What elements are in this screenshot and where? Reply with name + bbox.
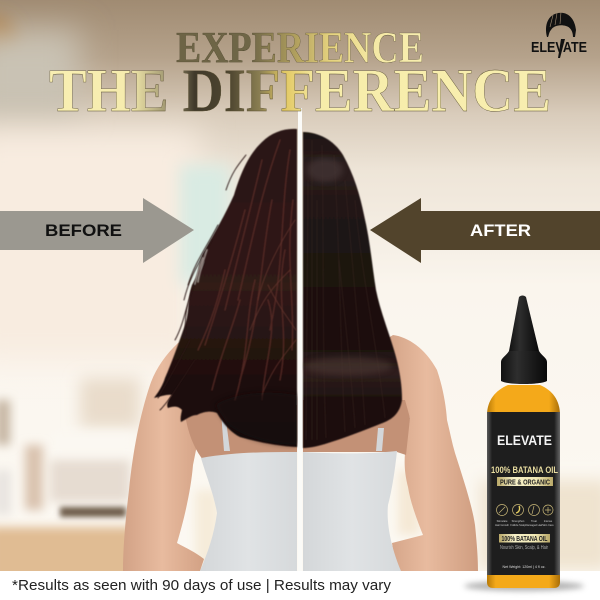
benefit captions: Stimulate — [497, 519, 508, 523]
straight strand highlights — [306, 140, 385, 440]
hair shine band — [304, 357, 392, 375]
arrow: after — [370, 198, 600, 263]
benefit captions: Damaged Hair — [526, 523, 542, 527]
right strap — [376, 428, 384, 451]
bottle body — [487, 385, 560, 588]
cap — [501, 351, 547, 384]
nozzle — [509, 296, 539, 351]
benefit captions: Skin Care — [542, 523, 554, 527]
black label — [487, 412, 560, 575]
product bottle — [464, 296, 584, 591]
right back skin — [303, 400, 410, 455]
right tank top — [303, 451, 401, 571]
centre divider line — [298, 108, 302, 571]
benefit captions: Intense — [544, 519, 553, 523]
left tank top — [200, 452, 297, 571]
title line 2: THE DIFFERENCE — [49, 58, 551, 125]
flyaway and highlight strands — [158, 140, 296, 410]
before photo: woman's back with frizzy hair — [123, 129, 297, 571]
title — [49, 23, 551, 125]
nourish line: Nourish Skin, Scalp, & Hair — [500, 545, 548, 551]
frizzy hair mass — [154, 129, 297, 447]
logo wordmark: ELEVATE — [531, 39, 587, 56]
brand logo — [531, 12, 587, 58]
benefit captions: Hair Growth — [495, 523, 509, 527]
benefit captions: Strengthen — [512, 519, 525, 523]
title line 1: EXPERIENCE — [176, 23, 424, 72]
right arm and shoulder — [385, 335, 478, 571]
logo tick — [558, 39, 565, 58]
arrow: before — [0, 198, 194, 263]
benefit captions: Treat — [531, 519, 537, 523]
before label: BEFORE — [45, 221, 122, 240]
benefit captions — [495, 519, 554, 527]
disclaimer footnote: *Results as seen with 90 days of use | Results may vary — [12, 577, 391, 594]
left arm and shoulder — [123, 330, 210, 571]
after photo: woman's back with smooth hair — [303, 132, 478, 571]
batana band: 100% BATANA OIL — [502, 536, 548, 543]
icon: hair silhouette — [546, 12, 576, 37]
label product name: 100% BATANA OIL — [491, 465, 558, 476]
benefit captions: Follicle Scalp — [510, 523, 526, 527]
label brand: ELEVATE — [497, 432, 552, 448]
hair ends shadow — [215, 392, 297, 445]
bottle shadow — [464, 581, 584, 591]
smooth hair mass — [303, 132, 402, 448]
pure and organic band: PURE & ORGANIC — [500, 478, 550, 486]
left strap — [221, 412, 230, 451]
left back skin — [186, 405, 297, 460]
batana band — [499, 534, 550, 543]
net weight: Net Weight: 120ml | 4 fl oz. — [502, 565, 546, 569]
benefit icons — [496, 504, 553, 516]
after label: AFTER — [470, 221, 531, 240]
